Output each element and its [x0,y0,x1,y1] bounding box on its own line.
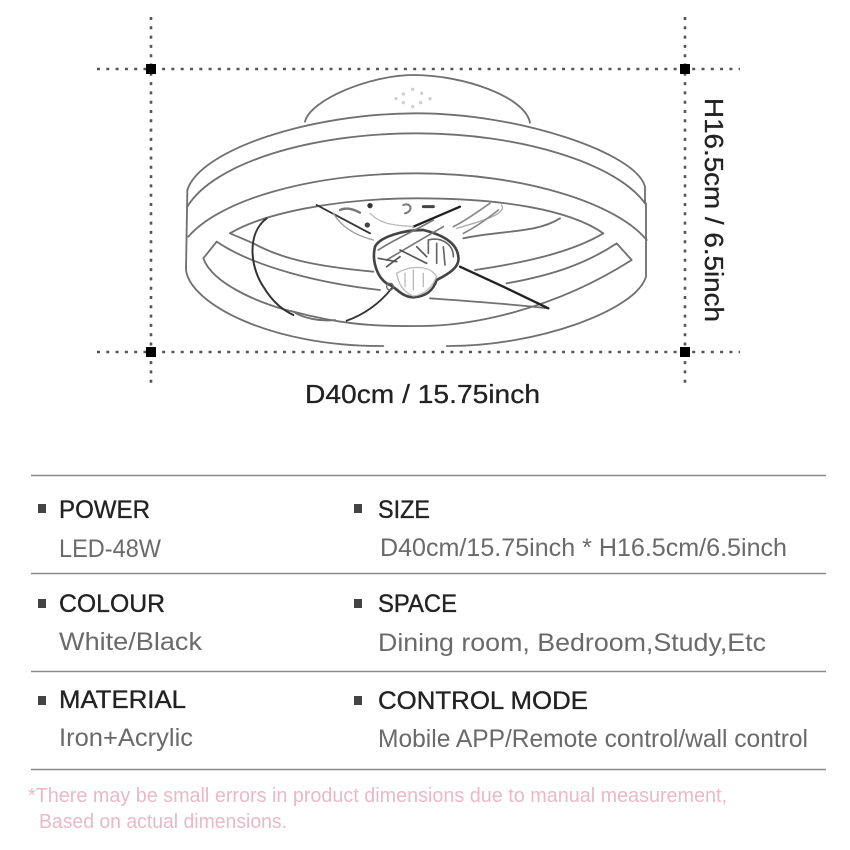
spec: space: Dining room, Bedroom,Study,Etc [378,629,766,657]
dimension guides [97,17,740,387]
motor hub [374,220,459,297]
spec: control mode: CONTROL MODE [378,687,588,715]
spec: colour: COLOUR [59,590,165,618]
footnote: *There may be small errors in product dimensions due to manual measurement, [28,785,727,807]
spec: control mode: Mobile APP/Remote control/wall control [378,725,808,753]
footnote: Based on actual dimensions. [39,811,287,833]
table dividers [31,476,826,770]
spec: material: Iron+Acrylic [59,724,193,752]
spec: colour [38,590,203,656]
spec: control mode [354,687,808,753]
spec: material [38,686,193,752]
height label: H16.5cm / 6.5inch [699,98,729,322]
mechanism details [340,203,498,233]
footnote [28,785,727,833]
diameter label: D40cm / 15.75inch [305,379,540,409]
spec: colour: White/Black [59,628,203,656]
spec: size: D40cm/15.75inch * H16.5cm/6.5inch [380,534,787,562]
icon: canopy dome [305,75,530,123]
spec: power: LED-48W [59,535,161,563]
fan blades [217,205,603,321]
spec: space: SPACE [378,590,457,618]
fan housing rings [186,113,647,346]
spec: material: MATERIAL [59,686,186,714]
spec: size: SIZE [378,496,430,524]
ceiling fan line drawing [186,75,647,346]
spec: size [354,496,787,562]
spec: power [38,496,161,563]
spec: space [354,590,766,657]
spec: power: POWER [59,496,150,524]
